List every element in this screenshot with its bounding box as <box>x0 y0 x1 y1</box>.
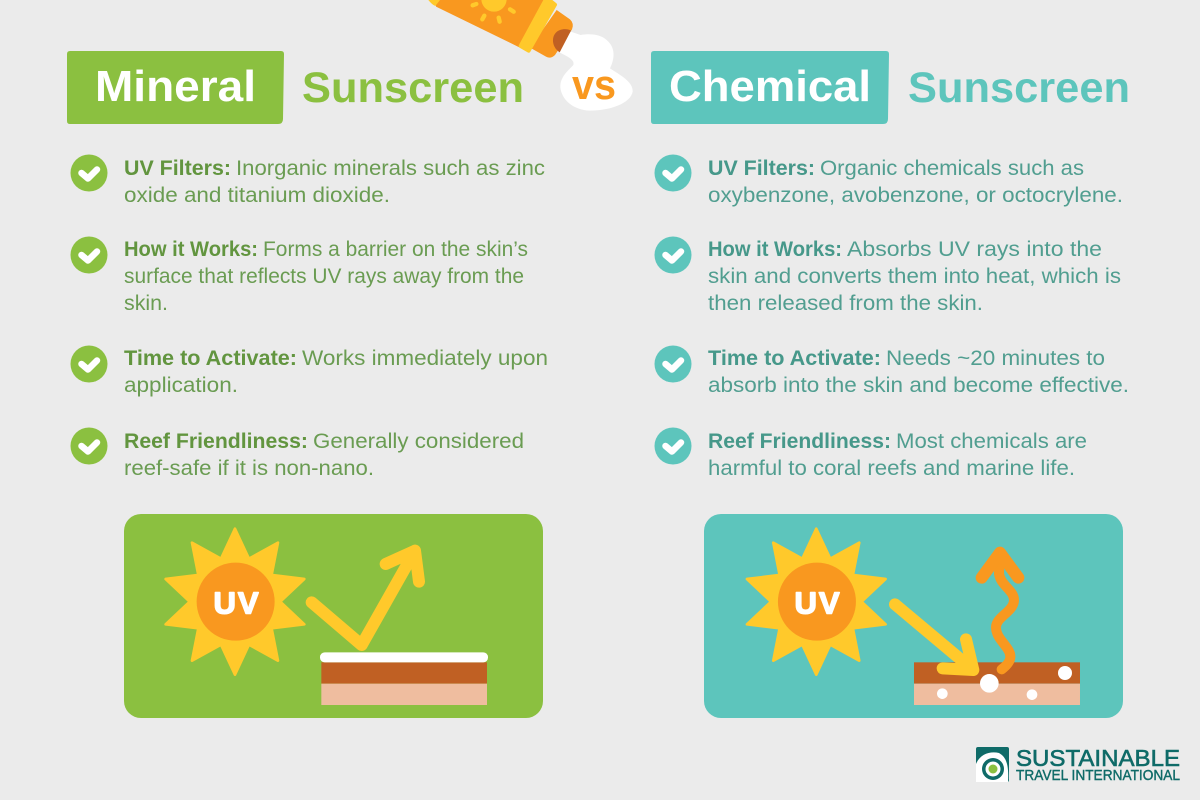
item: mineral how it works: Forms a barrier on the skin’s <box>263 238 528 261</box>
icon: skin layers with white mineral barrier <box>320 652 488 705</box>
item: chemical UV filters <box>654 154 1123 207</box>
icon: sunscreen tube squeezing onto vs badge: vs <box>572 61 616 108</box>
item: chemical time to activate: Time to Activate: <box>708 347 881 370</box>
icon: skin layers with absorbed chemical particles <box>914 662 1080 705</box>
item: chemical how it works: Absorbs UV rays into the <box>847 238 1102 261</box>
item: mineral time to activate: application. <box>124 374 238 397</box>
item: mineral reef friendliness: reef-safe if it is non-nano. <box>124 457 374 480</box>
arrow: heat released from the skin <box>982 553 1018 669</box>
item: mineral time to activate <box>70 346 548 397</box>
logo: Sustainable Travel International: SUSTAINABLE <box>1016 745 1180 771</box>
item: mineral how it works <box>70 236 528 315</box>
list: chemical sunscreen facts <box>654 154 1129 480</box>
item: mineral reef friendliness <box>70 428 524 480</box>
icon: sun with UV label <box>166 529 304 675</box>
item: chemical time to activate: absorb into the skin and become effective. <box>708 374 1129 397</box>
item: mineral time to activate: Time to Activate: <box>124 347 297 370</box>
item: chemical UV filters: oxybenzone, avobenzone, or octocrylene. <box>708 184 1123 207</box>
item: chemical how it works: How it Works: <box>708 238 842 261</box>
item: chemical UV filters: UV Filters: <box>708 157 815 180</box>
item: chemical how it works: skin and converts them into heat, which is <box>708 265 1121 288</box>
item: mineral UV filters: Inorganic minerals such as zinc <box>236 157 545 180</box>
icon: sun with UV label: UV <box>794 586 840 620</box>
item: chemical time to activate: Needs ~20 minutes to <box>886 347 1105 370</box>
item: chemical reef friendliness: Most chemicals are <box>896 430 1087 453</box>
heading: Mineral Sunscreen: Mineral <box>95 62 256 111</box>
item: chemical reef friendliness: Reef Friendliness: <box>708 430 891 453</box>
item: mineral time to activate: Works immediately upon <box>302 347 548 370</box>
arrow: UV ray entering the skin <box>895 604 973 670</box>
heading: Chemical Sunscreen: Sunscreen <box>908 64 1130 112</box>
item: mineral reef friendliness: Reef Friendliness: <box>124 430 308 453</box>
item: chemical reef friendliness <box>654 428 1087 480</box>
heading: Chemical Sunscreen: Chemical <box>669 62 871 111</box>
arrow: UV ray reflected off the barrier <box>312 551 419 645</box>
heading: Chemical Sunscreen <box>651 51 1130 124</box>
heading: Mineral Sunscreen: Sunscreen <box>302 64 524 112</box>
item: mineral UV filters: oxide and titanium dioxide. <box>124 184 390 207</box>
panel: mineral sunscreen reflects UV <box>124 514 543 718</box>
logo: Sustainable Travel International: TRAVEL INTERNATIONAL <box>1016 768 1180 784</box>
item: chemical how it works: then released from the skin. <box>708 292 983 315</box>
icon: sun with UV label <box>747 529 886 675</box>
item: mineral UV filters: UV Filters: <box>124 157 231 180</box>
item: chemical time to activate <box>654 346 1129 397</box>
item: mineral how it works: skin. <box>124 292 168 315</box>
logo: Sustainable Travel International <box>976 745 1180 784</box>
item: mineral reef friendliness: Generally considered <box>313 430 524 453</box>
list: mineral sunscreen facts <box>70 154 548 480</box>
item: chemical reef friendliness: harmful to coral reefs and marine life. <box>708 457 1075 480</box>
panel: chemical sunscreen absorbs UV <box>704 514 1123 718</box>
item: mineral UV filters <box>70 154 545 207</box>
item: mineral how it works: How it Works: <box>124 238 258 261</box>
icon: sunscreen tube squeezing onto vs badge <box>428 0 633 111</box>
item: chemical UV filters: Organic chemicals such as <box>820 157 1084 180</box>
heading: Mineral Sunscreen <box>67 51 524 124</box>
icon: sun with UV label: UV <box>214 586 259 620</box>
item: mineral how it works: surface that reflects UV rays away from the <box>124 265 524 288</box>
item: chemical how it works <box>654 236 1121 315</box>
